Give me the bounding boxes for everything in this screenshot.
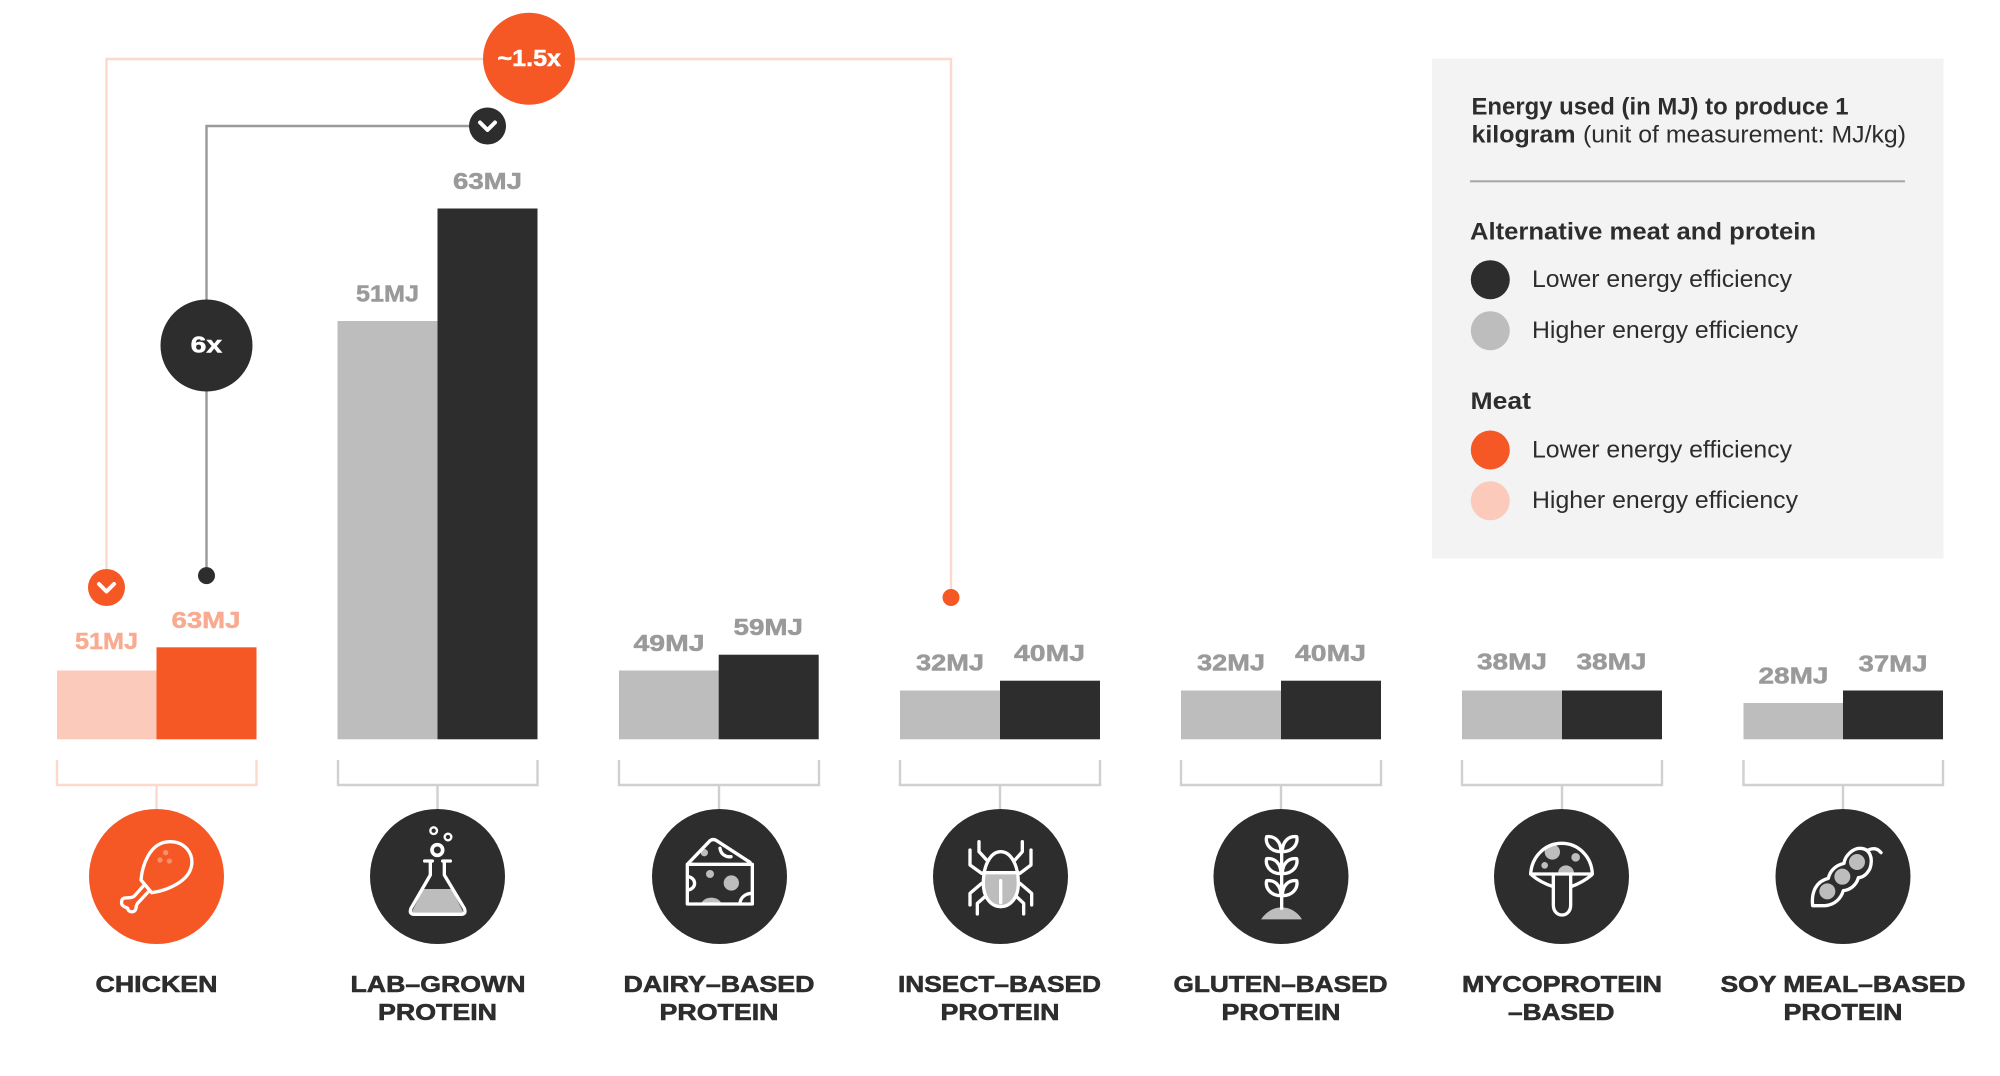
legend group title: meat: Meat [1470, 388, 1531, 415]
bars: chicken: 51MJ [75, 628, 138, 654]
legend item: alternative higher efficiency: Higher energy efficiency [1532, 317, 1798, 344]
bars: dairy-based protein: 59MJ [734, 614, 803, 640]
icon: cheese [652, 809, 787, 944]
icon: orange end dot [942, 589, 960, 606]
bars: lab-grown protein: 63MJ [453, 168, 522, 194]
icon: soy pod [1776, 809, 1910, 944]
bracket: mycoprotein-based [1462, 760, 1662, 810]
label: dairy-based protein [624, 971, 814, 1025]
connector: chicken to insect comparison [88, 13, 960, 606]
legend group title: alternative meat and protein: Alternative meat and protein [1470, 218, 1816, 246]
icon: insect [933, 809, 1068, 944]
bars: insect-based protein: 40MJ [1014, 640, 1085, 666]
legend heading: kilogram [1472, 122, 1576, 148]
bars: dairy-based protein [619, 614, 819, 739]
label: chicken: CHICKEN [96, 971, 218, 997]
bracket: insect-based [900, 760, 1100, 810]
label: lab-grown protein [350, 971, 526, 1025]
label: soy meal-based protein: PROTEIN [1784, 999, 1902, 1025]
bracket: chicken [57, 760, 256, 810]
bars: mycoprotein-based: 38MJ [1477, 648, 1547, 674]
bars: lab-grown protein [338, 168, 538, 739]
bars: insect-based protein: 32MJ [916, 650, 984, 676]
label: lab-grown protein: PROTEIN [378, 999, 497, 1025]
bars: soy meal-based protein: 37MJ [1858, 650, 1928, 676]
legend item: meat higher efficiency: Higher energy efficiency [1532, 487, 1798, 514]
icon: chicken drumstick [89, 809, 224, 944]
bars: lab-grown protein: 51MJ [356, 280, 419, 306]
label: gluten-based protein: GLUTEN–BASED [1174, 971, 1388, 997]
label: soy meal-based protein [1720, 971, 1966, 1025]
label: insect-based protein: PROTEIN [940, 999, 1060, 1025]
legend item: meat lower efficiency [1471, 430, 1792, 470]
bracket: soy meal-based [1744, 760, 1943, 810]
bars: dairy-based protein: 49MJ [634, 630, 704, 656]
legend item: meat higher efficiency [1471, 481, 1798, 520]
connector: chicken to lab-grown comparison [160, 108, 506, 584]
bars: gluten-based protein [1181, 640, 1381, 739]
bars: chicken: 63MJ [172, 607, 240, 633]
bars: soy meal-based protein: 28MJ [1758, 662, 1828, 688]
legend item: alternative higher efficiency [1471, 311, 1798, 350]
label: insect-based protein [898, 971, 1101, 1025]
callout: 1.5x: ~1.5x [498, 45, 561, 71]
legend item: meat lower efficiency: Lower energy efficiency [1532, 436, 1792, 464]
label: dairy-based protein: DAIRY–BASED [624, 971, 814, 997]
bracket: gluten-based [1181, 760, 1381, 810]
label: insect-based protein: INSECT–BASED [898, 971, 1101, 997]
bracket: dairy-based [619, 760, 819, 810]
callout: 6x: 6x [191, 332, 222, 358]
label: soy meal-based protein: SOY MEAL–BASED [1720, 971, 1966, 997]
label: gluten-based protein [1174, 971, 1388, 1025]
icon: dark end dot [198, 567, 215, 584]
callout: 6x [160, 300, 252, 392]
bars: gluten-based protein: 32MJ [1197, 650, 1265, 676]
bracket: lab-grown [338, 760, 538, 810]
label: mycoprotein-based [1462, 971, 1662, 1025]
bars: gluten-based protein: 40MJ [1295, 640, 1366, 666]
panel: legend [1432, 58, 1944, 558]
legend heading: (unit of measurement: MJ/kg) [1583, 122, 1906, 148]
label: lab-grown protein: LAB–GROWN [350, 971, 526, 997]
label: dairy-based protein: PROTEIN [660, 999, 778, 1025]
icon: orange chevron marker [88, 569, 125, 606]
label: gluten-based protein: PROTEIN [1222, 999, 1340, 1025]
legend heading [1472, 94, 1906, 148]
legend heading: Energy used (in MJ) to produce 1 [1472, 94, 1848, 120]
label: mycoprotein-based: MYCOPROTEIN [1462, 971, 1662, 997]
bar chart [57, 168, 1943, 739]
icon: mushroom [1494, 809, 1629, 944]
bars: mycoprotein-based [1462, 648, 1662, 739]
legend item: alternative lower efficiency [1471, 260, 1792, 299]
icon: dark chevron marker [469, 108, 506, 144]
bars: mycoprotein-based: 38MJ [1576, 648, 1646, 674]
label: mycoprotein-based: –BASED [1508, 999, 1614, 1025]
icon: wheat plant [1214, 809, 1348, 944]
bars: soy meal-based protein [1744, 650, 1943, 739]
bars: insect-based protein [900, 640, 1100, 739]
callout: 1.5x [483, 13, 575, 105]
bars: chicken [57, 607, 256, 739]
icon: lab flask [370, 809, 505, 944]
legend item: alternative lower efficiency: Lower energy efficiency [1532, 266, 1792, 293]
